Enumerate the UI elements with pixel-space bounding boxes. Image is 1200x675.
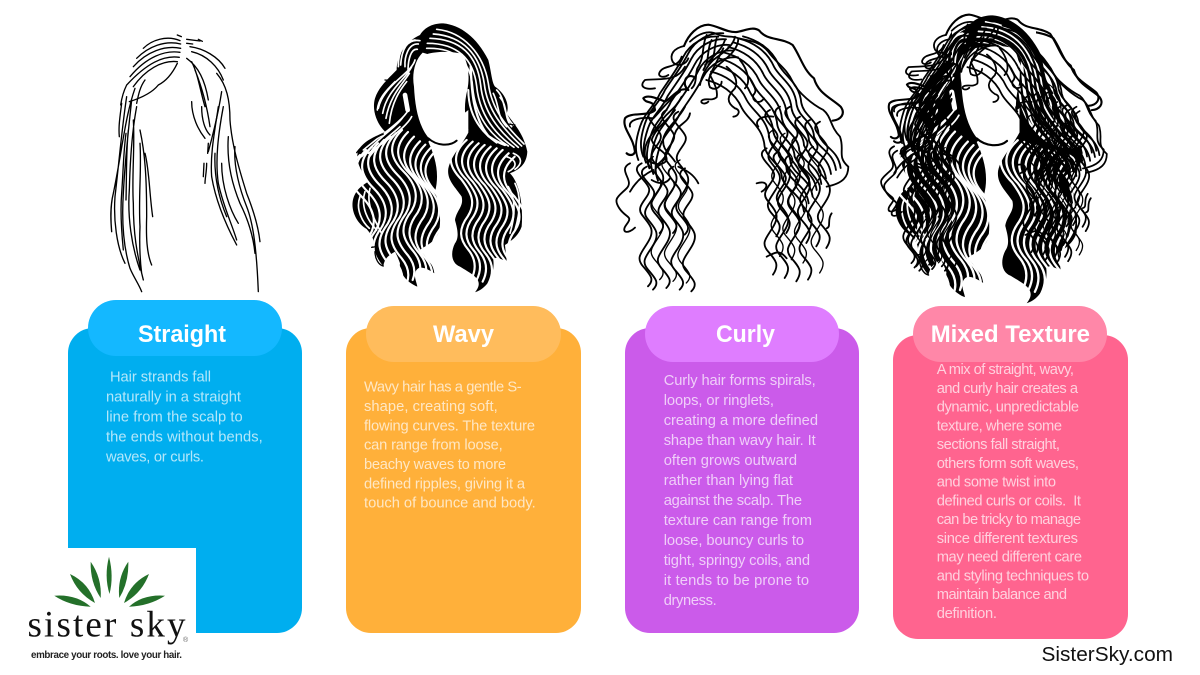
text: mixed texture description <box>937 362 1089 622</box>
text: curly description: rather than lying flat <box>664 473 793 489</box>
text: mixed texture description: definition. <box>937 606 997 622</box>
text: curly description <box>664 373 818 609</box>
text: straight description: the ends without bends, <box>106 430 263 446</box>
text: straight description: line from the scalp to <box>106 410 243 426</box>
text: mixed texture description: dynamic, unpredictable <box>937 400 1079 416</box>
text: mixed texture description: others form soft waves, <box>937 456 1079 472</box>
heading pill: curly: Curly <box>716 321 776 348</box>
heading pill: wavy: Wavy <box>433 321 495 348</box>
text: mixed texture description: and curly hair creates a <box>937 381 1079 397</box>
text: mixed texture description: texture, where some <box>937 418 1062 434</box>
text: straight description: waves, or curls. <box>105 450 204 466</box>
panel: mixed texture <box>893 306 1128 639</box>
text: curly description: texture can range from <box>664 513 812 529</box>
hair illustration: mixed texture <box>893 15 1083 313</box>
text: curly description: it tends to be prone to <box>664 573 809 589</box>
hair illustration: wavy <box>350 23 528 302</box>
text: curly description: dryness. <box>664 593 717 609</box>
text: wavy description: can range from loose, <box>364 438 503 454</box>
text: curly description: loops, or ringlets, <box>664 393 774 409</box>
text: mixed texture description: may need different care <box>937 550 1082 566</box>
text: curly description: loose, bouncy curls to <box>664 533 804 549</box>
text: straight description: naturally in a straight <box>106 390 241 406</box>
text: curly description: shape than wavy hair. It <box>664 433 816 449</box>
icon: green leaves <box>54 557 165 607</box>
curly layer <box>881 15 1104 268</box>
panel: curly <box>625 306 859 633</box>
text: straight description: Hair strands fall <box>110 370 211 386</box>
text: wavy description: Wavy hair has a gentle S- <box>364 380 522 396</box>
heading pill: straight <box>88 300 282 356</box>
text: mixed texture description: A mix of straight, wavy, <box>937 362 1074 378</box>
text: wavy description: beachy waves to more <box>364 457 506 473</box>
panel: straight <box>68 300 302 633</box>
panel: wavy <box>346 306 581 633</box>
text: straight description <box>105 370 263 466</box>
text: curly description: against the scalp. The <box>664 493 802 509</box>
extra curl density on the sides <box>884 19 1107 272</box>
text: curly description: often grows outward <box>664 453 797 469</box>
text: wavy description: defined ripples, giving it a <box>364 476 526 492</box>
logo registered mark: ® <box>183 636 189 644</box>
logo wordmark: sister sky <box>28 604 186 646</box>
heading pill: mixed texture: Mixed Texture <box>931 321 1090 348</box>
logo: sister sky <box>0 548 196 675</box>
text: wavy description: flowing curves. The texture <box>364 418 535 434</box>
text: mixed texture description: since different textures <box>937 531 1078 547</box>
website url: SisterSky.com <box>1042 643 1173 666</box>
wavy layer <box>893 15 1083 313</box>
text: wavy description: touch of bounce and body. <box>364 496 536 512</box>
text: wavy description: shape, creating soft, <box>364 399 498 415</box>
text: mixed texture description: and styling techniques to <box>937 568 1089 584</box>
text: curly description: tight, springy coils, and <box>664 553 810 569</box>
heading pill: wavy <box>366 306 561 362</box>
heading pill: straight: Straight <box>138 321 226 348</box>
text: mixed texture description: can be tricky to manage <box>937 512 1081 528</box>
logo tagline: embrace your roots. love your hair. <box>31 650 182 661</box>
text: curly description: Curly hair forms spirals, <box>664 373 816 389</box>
heading pill: curly <box>645 306 839 362</box>
text: curly description: creating a more defined <box>664 413 818 429</box>
text: mixed texture description: and some twist into <box>937 474 1056 490</box>
text: mixed texture description: defined curls or coils. It <box>937 493 1081 509</box>
heading pill: mixed texture <box>913 306 1107 362</box>
text: wavy description <box>364 380 536 512</box>
hair illustration: curly <box>616 25 848 291</box>
text: mixed texture description: maintain balance and <box>937 587 1067 603</box>
text: mixed texture description: sections fall straight, <box>937 437 1060 453</box>
hair illustration: straight <box>111 35 260 292</box>
